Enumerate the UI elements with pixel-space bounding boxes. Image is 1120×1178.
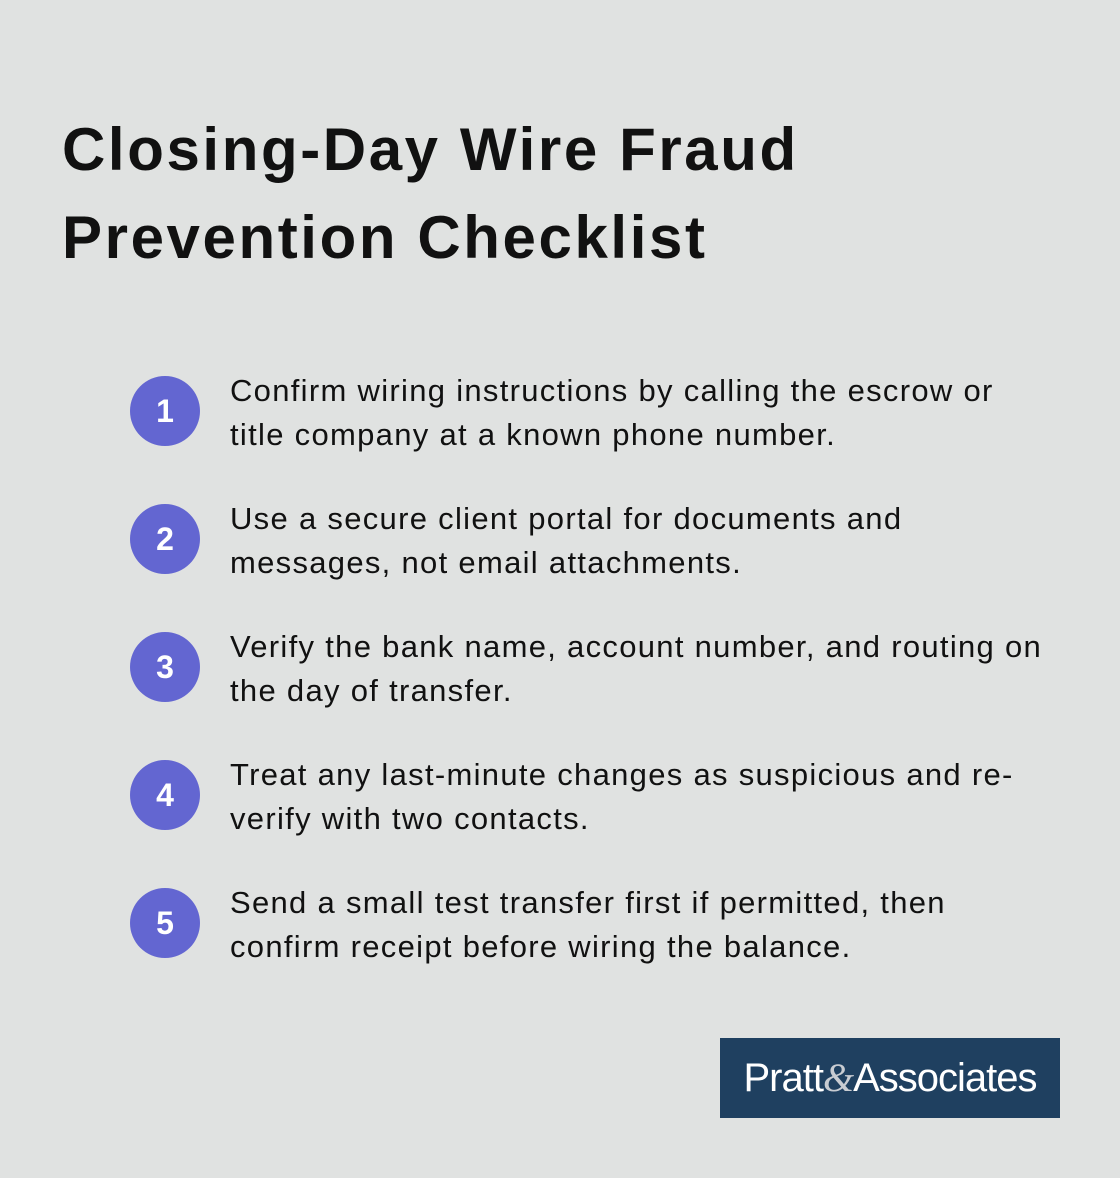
text 2: messages, not email attachments. (230, 545, 742, 580)
logo (720, 1038, 1060, 1118)
item 4 (130, 757, 1014, 836)
text 5: confirm receipt before wiring the balance. (230, 929, 852, 964)
text 2: Use a secure client portal for documents and (230, 501, 902, 536)
number badge 1: 1 (156, 393, 174, 429)
text 2 (230, 501, 902, 580)
number badge 4: 4 (156, 777, 174, 813)
text 5: Send a small test transfer first if permitted, then (230, 885, 946, 920)
number badge 3 (130, 632, 200, 702)
number badge 1 (130, 376, 200, 446)
text 5 (230, 885, 946, 964)
number badge 5: 5 (156, 905, 174, 941)
title: Prevention Checklist (62, 204, 708, 271)
text 3: the day of transfer. (230, 673, 513, 708)
title: Closing-Day Wire Fraud (62, 116, 799, 183)
text 4: Treat any last-minute changes as suspicious and re- (230, 757, 1014, 792)
item 3 (130, 629, 1042, 708)
number badge 2 (130, 504, 200, 574)
number badge 3: 3 (156, 649, 174, 685)
item 2 (130, 501, 902, 580)
text 1: Confirm wiring instructions by calling the escrow or (230, 373, 994, 408)
text 3: Verify the bank name, account number, and routing on (230, 629, 1042, 664)
text 1 (230, 373, 994, 452)
item 1 (130, 373, 994, 452)
text 1: title company at a known phone number. (230, 417, 836, 452)
number badge 2: 2 (156, 521, 174, 557)
number badge 5 (130, 888, 200, 958)
text 3 (230, 629, 1042, 708)
text 4: verify with two contacts. (230, 801, 590, 836)
item 5 (130, 885, 946, 964)
logo: Pratt&Associates (743, 1055, 1037, 1100)
number badge 4 (130, 760, 200, 830)
title (62, 116, 799, 271)
text 4 (230, 757, 1014, 836)
